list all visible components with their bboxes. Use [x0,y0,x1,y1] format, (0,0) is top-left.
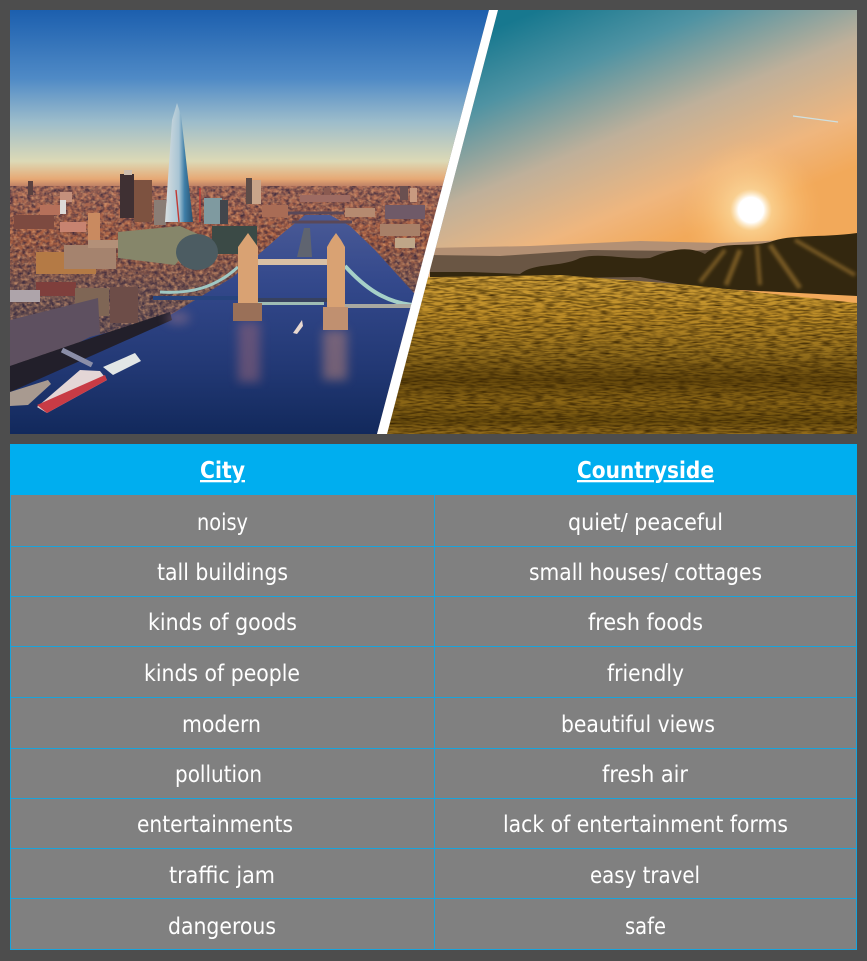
row 3: fresh foods [588,610,703,636]
row 6: fresh air [602,762,688,788]
distant hills [434,240,774,256]
Tower Bridge [153,233,412,330]
row 9: dangerous [168,914,276,940]
heading: City: City [200,458,245,484]
row 9 [168,914,666,940]
row 4: kinds of people [144,661,300,687]
wheat field [380,275,857,434]
white diagonal divider [377,10,498,434]
apartment blocks [88,170,228,240]
row 8: traffic jam [169,863,275,889]
distant bridges [288,213,352,222]
tour boat [293,320,303,334]
table body cells [11,495,856,949]
heading: Countryside: Countryside [577,458,714,484]
row 7 [137,812,788,838]
city texture [10,186,442,364]
table header bar [10,444,857,495]
tree line [430,233,857,296]
row 1: noisy [197,510,248,536]
tractor tracks [430,283,857,330]
City Hall dome [176,234,218,270]
photo: London city skyline [10,10,490,434]
row 8: easy travel [590,863,700,889]
row 9: safe [625,914,666,940]
warship [297,228,312,257]
light rays [700,240,855,288]
row 2: small houses/ cottages [529,560,762,586]
moored boats [10,350,141,413]
row 3: kinds of goods [148,610,297,636]
row 4: friendly [607,661,684,687]
row 4 [144,661,684,687]
row 6 [175,762,688,788]
skyscraper: The Shard [165,103,193,222]
row 7: lack of entertainment forms [503,812,788,838]
row 6: pollution [175,762,262,788]
table grid underlay [10,495,857,950]
row 5: modern [182,712,261,738]
riverside warehouse [10,298,100,366]
photo: countryside field at sunset [380,10,860,437]
row 8 [169,863,700,889]
row 1: quiet/ peaceful [568,510,723,536]
row 2 [157,560,762,586]
row 1 [197,510,723,536]
sun [700,164,804,243]
row 5 [182,712,715,738]
city mass [10,186,445,377]
comparison table [10,444,857,950]
row 7: entertainments [137,812,293,838]
row 2: tall buildings [157,560,288,586]
mid-ground office blocks [10,226,257,323]
river Thames [10,215,445,434]
distant buildings [14,178,425,248]
dark embankment [10,312,172,392]
row 3 [148,610,703,636]
pier reflections [166,312,347,382]
contrail [793,116,838,122]
row 5: beautiful views [561,712,715,738]
